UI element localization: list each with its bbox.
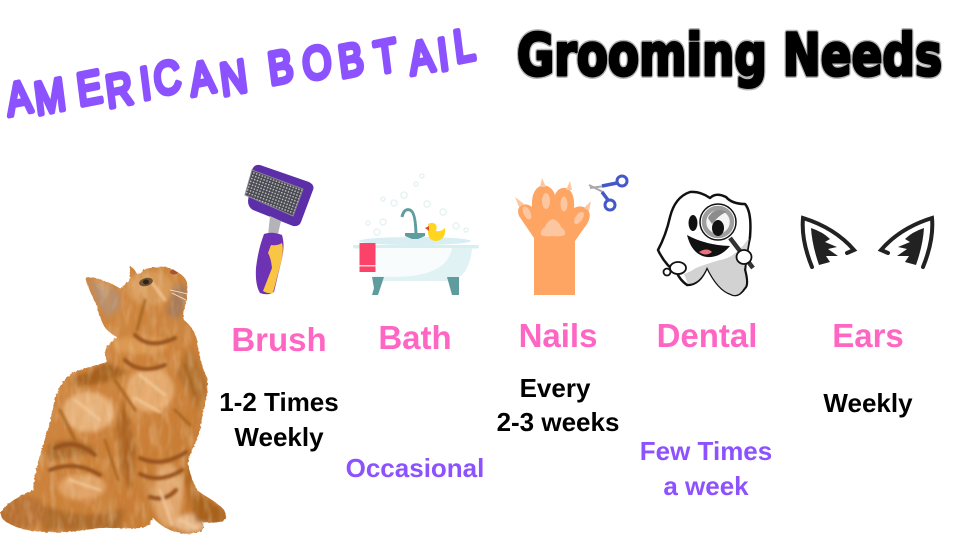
right ear [881, 218, 932, 267]
cat illustration [0, 262, 230, 536]
label: Brush: Brush [231, 321, 327, 358]
frequency: nails [497, 373, 619, 437]
label: Bath: Bath [378, 319, 452, 356]
left ear [803, 218, 854, 267]
icon: slicker brush [245, 165, 314, 294]
label: Nails: Nails [519, 317, 597, 354]
frequency: brush: Weekly [234, 422, 324, 452]
frequency: dental: a week [663, 471, 749, 501]
frequency: dental: Few Times [640, 436, 772, 466]
label: Ears: Ears [832, 317, 904, 354]
icon: tooth with magnifier [658, 192, 753, 295]
frequency: brush: 1-2 Times [219, 387, 339, 417]
title: American Bobtail: AMERICANBOBTAIL [4, 18, 477, 126]
icon: scissors [589, 176, 627, 210]
frequency: dental [640, 436, 772, 501]
frequency: nails: 2-3 weeks [497, 407, 619, 437]
frequency: bath: Occasional [346, 453, 484, 483]
icon: paw with scissors [515, 176, 627, 295]
label: Dental: Dental [657, 317, 757, 354]
frequency: nails: Every [520, 373, 591, 403]
icon: bathtub [353, 174, 479, 295]
icon: cat ears [803, 218, 932, 267]
frequency: brush [219, 387, 339, 452]
frequency: ears: Weekly [823, 388, 913, 418]
